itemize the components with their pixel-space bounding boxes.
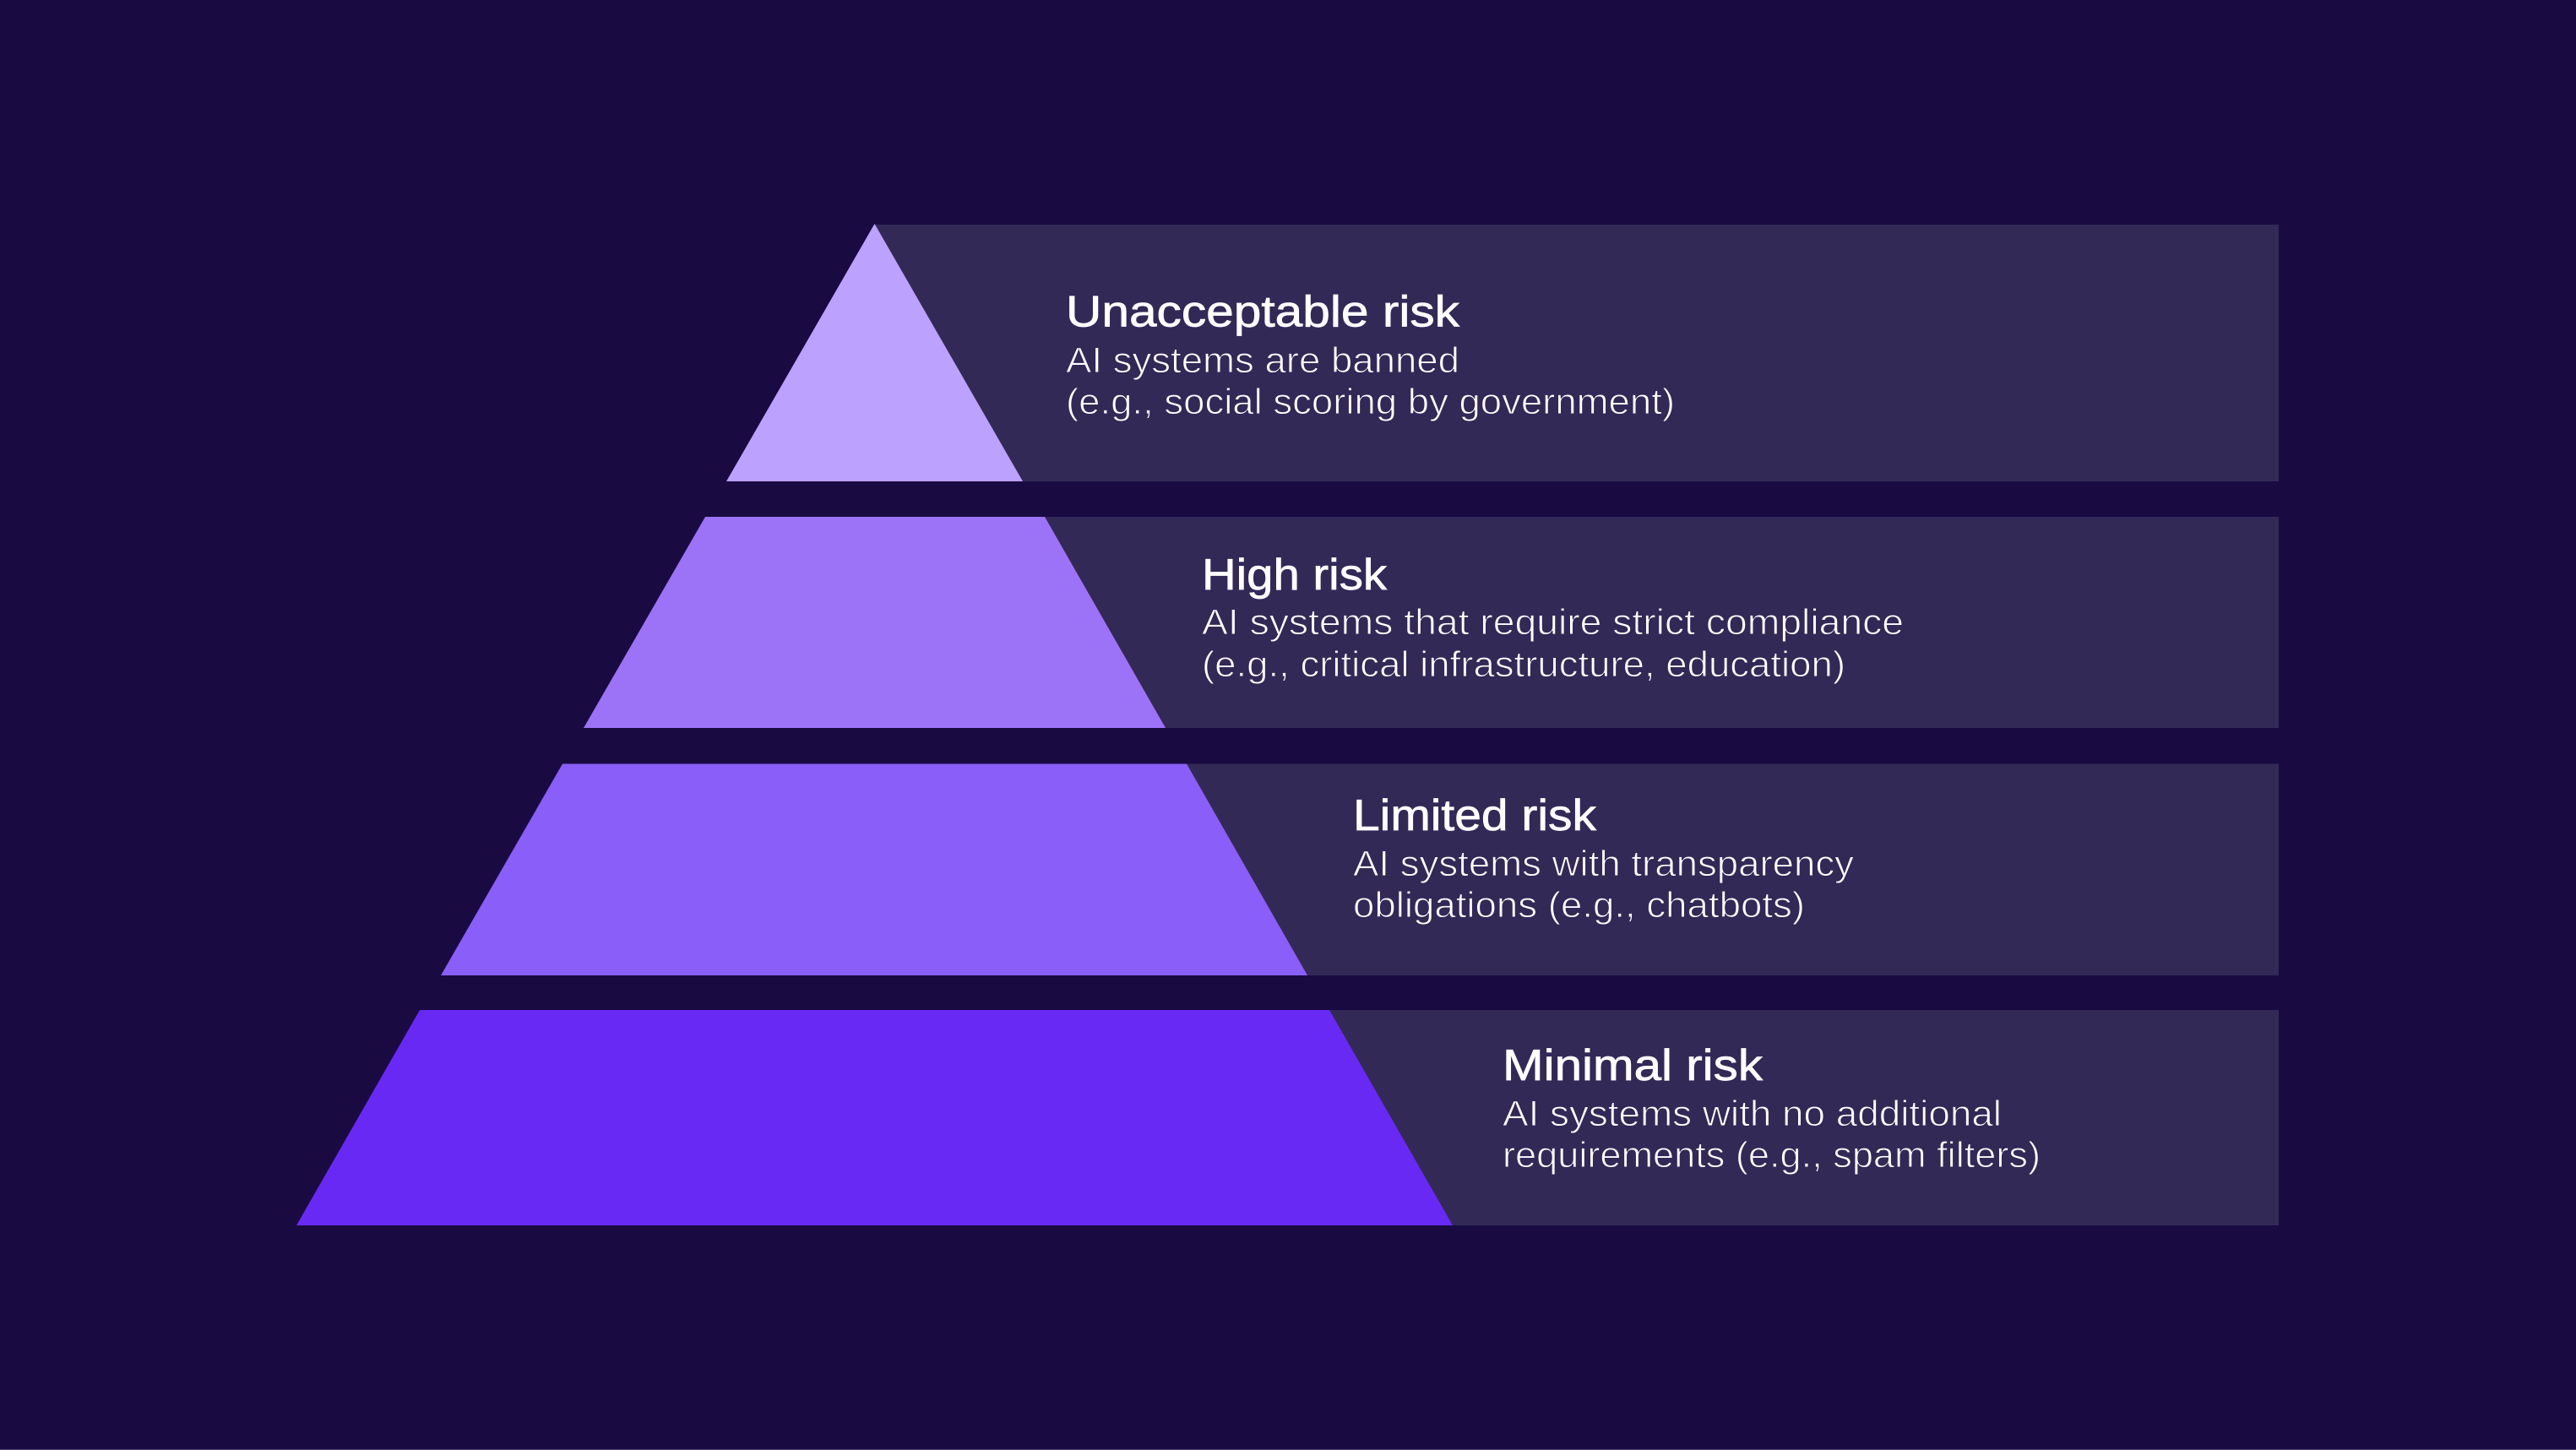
panel background: limited risk [1187, 763, 2279, 975]
description: minimal risk: requirements (e.g., spam filters) [1503, 1135, 2041, 1176]
description: minimal risk [1503, 1094, 2041, 1176]
description: high risk: AI systems that require strict compliance [1202, 602, 1904, 643]
description: limited risk: obligations (e.g., chatbots) [1353, 885, 1805, 926]
panel: limited risk [441, 763, 2279, 975]
panel: unacceptable risk [726, 224, 2279, 481]
pyramid tier: unacceptable risk [726, 224, 1023, 481]
pyramid tier: minimal risk [296, 1010, 1453, 1225]
description: high risk: (e.g., critical infrastructure, education) [1202, 644, 1845, 685]
panel: minimal risk [296, 1010, 2279, 1225]
panel background: minimal risk [1329, 1010, 2279, 1225]
description: unacceptable risk: (e.g., social scoring by government) [1066, 382, 1675, 422]
description: unacceptable risk: AI systems are banned [1066, 340, 1459, 381]
heading: high risk: High risk [1202, 551, 1388, 600]
pyramid tier: high risk [584, 517, 1166, 728]
panel background: high risk [1045, 517, 2279, 728]
panel background: unacceptable risk [874, 225, 2279, 481]
pyramid tier: limited risk [441, 763, 1307, 975]
description: limited risk: AI systems with transparency [1353, 844, 1855, 884]
description: minimal risk: AI systems with no additional [1503, 1094, 2002, 1134]
description: high risk [1202, 602, 1904, 685]
description: unacceptable risk [1066, 340, 1675, 422]
heading: minimal risk: Minimal risk [1503, 1041, 1764, 1090]
description: limited risk [1353, 844, 1855, 926]
panel: high risk [584, 517, 2279, 728]
heading: limited risk: Limited risk [1353, 791, 1597, 840]
heading: unacceptable risk: Unacceptable risk [1066, 287, 1460, 336]
